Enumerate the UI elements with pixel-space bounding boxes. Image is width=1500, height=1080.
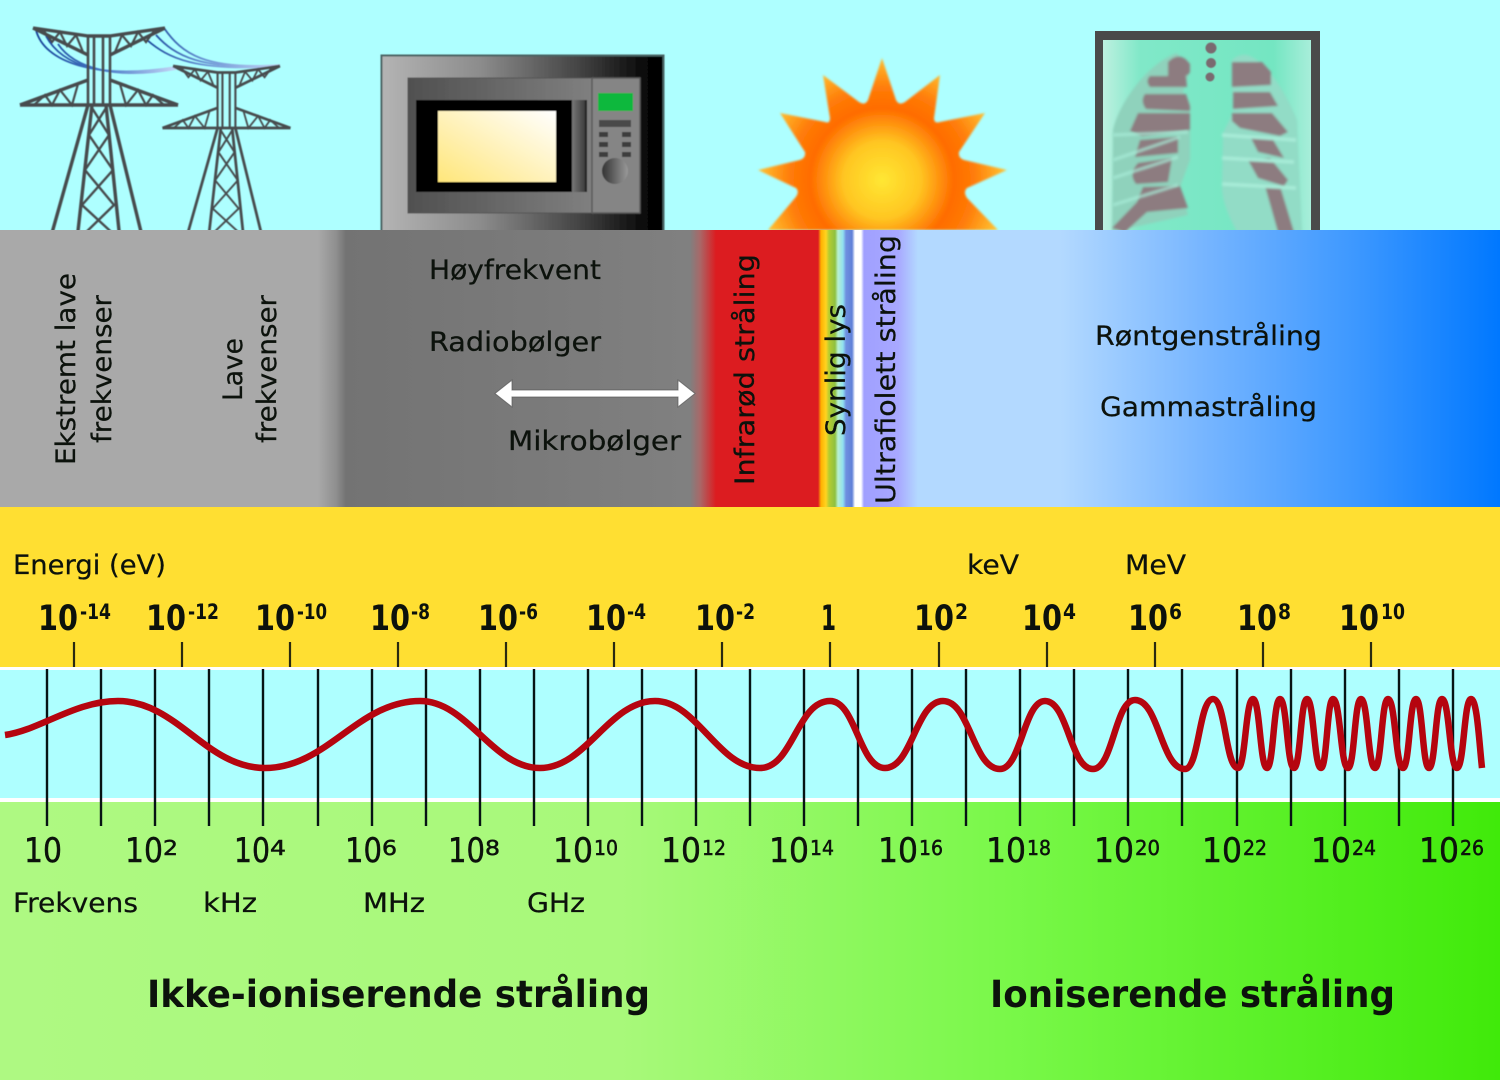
heading: energy units: Energi (eV) (13, 550, 166, 581)
frequency scale numbers: 2 (163, 836, 178, 860)
energy scale numbers: 10 (1339, 599, 1379, 639)
label: Mikrobølger: Mikrobølger (508, 426, 682, 457)
label: Lave frekvenser (218, 294, 283, 443)
energy scale numbers: -6 (519, 600, 538, 624)
label: Lave frekvenser: Lave (218, 338, 249, 401)
heading: Ikke-ioniserende stråling: Ikke-ioniserende stråling (147, 973, 650, 1016)
background: spectrum band (0, 230, 1500, 507)
icon: chest x-ray (1095, 31, 1320, 236)
frequency scale numbers: 16 (919, 836, 943, 860)
x-ray vertebrae (1206, 42, 1216, 82)
background: sky (0, 0, 1500, 230)
frequency scale numbers: 26 (1460, 836, 1484, 860)
energy scale numbers: 10 (1381, 600, 1405, 624)
heading: frequency units: GHz (527, 888, 585, 919)
frequency scale numbers: 24 (1352, 836, 1376, 860)
frequency scale numbers: 22 (1243, 836, 1267, 860)
label: Ultrafiolett stråling: Ultrafiolett stråling (871, 235, 902, 504)
heading: Ioniserende stråling: Ioniserende stråling (990, 973, 1395, 1016)
energy scale numbers: 10 (370, 599, 410, 639)
frequency scale numbers: 12 (702, 836, 726, 860)
energy scale numbers: 4 (1063, 600, 1076, 624)
frequency scale numbers: 10 (345, 831, 382, 871)
frequency scale numbers: 8 (485, 836, 500, 860)
frequency scale numbers: 10 (24, 831, 62, 871)
icon: sun (758, 58, 1007, 230)
energy scale numbers: 8 (1278, 600, 1291, 624)
icon: power pylons (20, 28, 290, 240)
background: wave strip (0, 667, 1500, 802)
frequency scale numbers: 10 (594, 836, 618, 860)
heading: energy units (13, 550, 1187, 581)
arrow: microwave range (495, 380, 695, 407)
energy scale numbers: 10 (586, 599, 626, 639)
frequency scale numbers: 10 (661, 831, 701, 871)
x-ray ribs (1113, 132, 1188, 205)
heading: energy units: MeV (1125, 550, 1187, 581)
frequency scale numbers: 4 (270, 836, 286, 860)
label: Røntgenstråling: Røntgenstråling (1095, 321, 1322, 352)
energy scale numbers: 10 (146, 599, 186, 639)
energy scale numbers (38, 599, 1405, 639)
energy scale numbers: 10 (695, 599, 735, 639)
label: Lave frekvenser: frekvenser (252, 294, 283, 443)
frequency scale numbers: 10 (1419, 831, 1459, 871)
frequency grid lines (47, 669, 1453, 826)
frequency scale numbers: 18 (1027, 836, 1051, 860)
frequency scale numbers: 10 (1202, 831, 1242, 871)
background: frequency strip (0, 802, 1500, 1080)
energy scale numbers: 1 (821, 599, 836, 639)
energy scale numbers: 2 (955, 600, 968, 624)
chart: electromagnetic wave (5, 699, 1482, 769)
frequency scale numbers (24, 831, 1484, 871)
frequency scale numbers: 10 (878, 831, 918, 871)
energy scale numbers: -10 (297, 600, 327, 624)
label: Ekstremt lave frekvenser: Ekstremt lave (51, 273, 82, 465)
label: Ekstremt lave frekvenser (51, 273, 118, 465)
label: Synlig lys: Synlig lys (821, 304, 852, 436)
frequency scale numbers: 10 (1094, 831, 1134, 871)
heading: frequency units (13, 888, 585, 919)
energy scale ticks (74, 642, 1371, 667)
frequency scale numbers: 20 (1135, 836, 1160, 860)
background: energy strip (0, 507, 1500, 667)
energy scale numbers: -12 (188, 600, 219, 624)
energy scale numbers: 10 (1128, 599, 1168, 639)
energy scale numbers: 10 (1237, 599, 1277, 639)
frequency scale numbers: 10 (986, 831, 1026, 871)
energy scale numbers: 6 (1169, 600, 1182, 624)
frequency scale numbers: 10 (448, 831, 485, 871)
label: Gammastråling: Gammastråling (1100, 392, 1317, 423)
wires behind the pylons (36, 28, 280, 73)
frequency scale numbers: 6 (382, 836, 397, 860)
label: Infrarød stråling: Infrarød stråling (730, 254, 761, 485)
pylon large (20, 28, 178, 240)
label: Radiobølger: Radiobølger (429, 327, 602, 358)
heading: energy units: keV (967, 550, 1020, 581)
energy scale numbers: 10 (38, 599, 78, 639)
frequency scale numbers: 10 (553, 831, 593, 871)
frequency scale numbers: 10 (769, 831, 809, 871)
energy scale numbers: 10 (255, 599, 295, 639)
energy scale numbers: 10 (914, 599, 954, 639)
heading: frequency units: MHz (363, 888, 425, 919)
frequency scale numbers: 10 (1311, 831, 1351, 871)
icon: microwave oven (382, 56, 664, 236)
energy scale numbers: -4 (627, 600, 646, 624)
label: Ekstremt lave frekvenser: frekvenser (87, 294, 118, 443)
frequency scale numbers: 10 (125, 831, 163, 871)
x-ray lungs (1112, 53, 1302, 232)
energy scale numbers: -8 (411, 600, 430, 624)
heading: frequency units: Frekvens (13, 888, 138, 919)
energy scale numbers: -2 (736, 600, 755, 624)
label: Høyfrekvent: Høyfrekvent (429, 255, 601, 286)
energy scale numbers: 10 (478, 599, 518, 639)
heading: frequency units: kHz (203, 888, 257, 919)
pylon small (162, 66, 290, 237)
energy scale numbers: -14 (80, 600, 111, 624)
frequency scale numbers: 10 (234, 831, 270, 871)
frequency scale numbers: 14 (810, 836, 834, 860)
energy scale numbers: 10 (1022, 599, 1062, 639)
